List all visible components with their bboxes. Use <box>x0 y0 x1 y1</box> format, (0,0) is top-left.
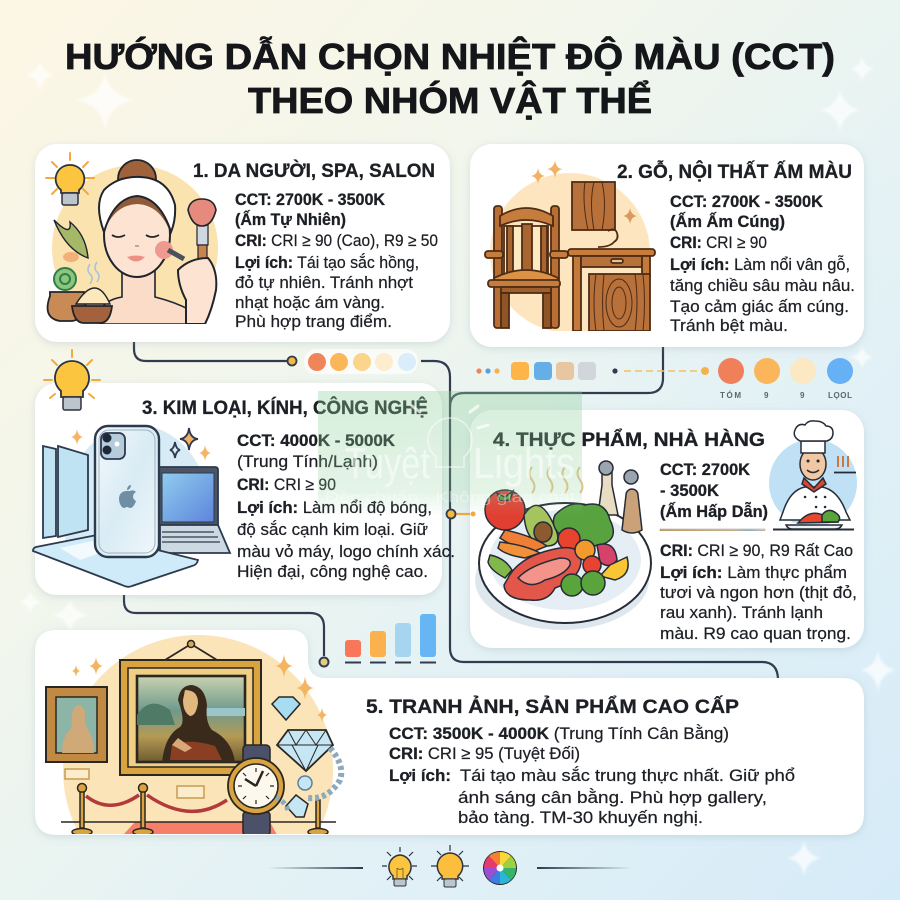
icon: plain bulb <box>431 845 469 887</box>
panel 2 text: CRI: CRI ≥ 90 <box>670 234 767 252</box>
panel 2 text <box>670 193 855 335</box>
panel 4 text: CRI: CRI ≥ 90, R9 Rất Cao <box>660 542 853 560</box>
swatch row: squares and palette: LỌOL <box>828 391 852 400</box>
panel 4 text: Lợi ích: Làm thực phẩm <box>660 564 847 582</box>
panel 2 text: Tránh bệt màu. <box>670 317 788 335</box>
bar chart swatches <box>320 614 436 666</box>
panel 3 heading: 3. KIM LOẠI, KÍNH, CÔNG NGHỆ <box>142 395 428 419</box>
icon: colour wheel <box>483 851 517 885</box>
panel 1 text: (Ấm Tự Nhiên) <box>235 210 346 229</box>
footer icons <box>268 845 632 887</box>
panel 4 text: CCT: 2700K <box>660 461 750 479</box>
swatch row: squares and palette <box>476 358 853 400</box>
panel 5 heading: 5. TRANH ẢNH, SẢN PHẨM CAO CẤP <box>366 695 739 718</box>
panel 3 text <box>237 432 455 581</box>
watermark <box>318 391 582 516</box>
panel 5 text: bảo tàng. TM-30 khuyến nghị. <box>458 809 703 827</box>
panel 3 text: Hiện đại, công nghệ cao. <box>237 563 428 581</box>
panel 1 text <box>235 191 438 331</box>
panel 4: food, restaurant <box>470 410 864 648</box>
panel 1 text: CCT: 2700K - 3500K <box>235 191 385 209</box>
title: THEO NHÓM VẬT THỂ <box>248 79 652 121</box>
panel 3 text: độ sắc cạnh kim loại. Giữ <box>237 520 428 539</box>
illustration: woman with brush <box>48 160 218 331</box>
panel 5 text: Tái tạo màu sắc trung thực nhất. Giữ phổ <box>460 766 795 785</box>
panel 1 text: nhạt hoặc ám vàng. <box>235 294 385 312</box>
panel 3 text: Lợi ích: Làm nổi độ bóng, <box>237 499 432 517</box>
connector lines between panels <box>124 342 778 680</box>
panel 3 text: màu vỏ máy, logo chính xác. <box>237 543 455 561</box>
panel 2 heading: 2. GỖ, NỘI THẤT ẤM MÀU <box>617 159 852 183</box>
panel 4 text: rau xanh). Tránh lạnh <box>660 604 823 622</box>
panel 3 text: CRI: CRI ≥ 90 <box>237 476 336 494</box>
panel 2: wood, warm furniture <box>470 144 864 347</box>
icon: light bulb <box>46 153 94 205</box>
panel 3: metal, glass, technology <box>33 383 455 595</box>
illustration: chef <box>769 421 857 530</box>
title: HƯỚNG DẪN CHỌN NHIỆT ĐỘ MÀU (CCT) <box>65 35 835 77</box>
panel 3 text: (Trung Tính/Lạnh) <box>237 453 378 471</box>
icon: filament bulb <box>382 847 417 886</box>
panel 5 text <box>389 724 795 827</box>
panel 5 text: CRI: CRI ≥ 95 (Tuyệt Đối) <box>389 745 580 763</box>
junction nodes <box>446 510 476 518</box>
panel 2 text: (Ấm Ấm Cúng) <box>670 212 785 231</box>
panel 3 text: CCT: 4000K - 5000K <box>237 432 395 450</box>
illustration: food plate <box>475 461 651 630</box>
panel 5 text: Lợi ích: <box>389 767 451 785</box>
icon: light bulb above panel 3 <box>44 350 100 410</box>
swatch row: warm dots <box>288 349 418 374</box>
panel 4 heading: 4. THỰC PHẨM, NHÀ HÀNG <box>493 428 765 451</box>
panel 4 text <box>660 461 857 643</box>
panel 1 text: Phù hợp trang điểm. <box>235 313 392 331</box>
swatch row: squares and palette: 9 <box>800 391 805 400</box>
panel 4 text: tươi và ngon hơn (thịt đỏ, <box>660 584 857 602</box>
swatch row: squares and palette: 9 <box>764 391 769 400</box>
panel 5: paintings, luxury products <box>33 630 866 839</box>
swatch row: squares and palette: TÓM <box>720 391 741 400</box>
panel 2 text: CCT: 2700K - 3500K <box>670 193 823 211</box>
panel 1 text: Lợi ích: Tái tạo sắc hồng, <box>235 253 419 272</box>
panel 1: skin, spa, salon <box>35 144 450 342</box>
illustration: phone, laptop, glass <box>33 425 230 587</box>
illustration: gallery and jewelry <box>45 635 344 834</box>
panel 4 text: - 3500K <box>660 482 719 500</box>
panel 1 heading: 1. DA NGƯỜI, SPA, SALON <box>193 158 435 182</box>
panel 2 text: Tạo cảm giác ấm cúng. <box>670 298 849 316</box>
panel 4 text: màu. R9 cao quan trọng. <box>660 625 851 643</box>
watermark: Tuyệt <box>345 439 430 488</box>
panel 2 text: tăng chiều sâu màu nâu. <box>670 277 855 295</box>
watermark: Đèn chuẩn - Không gian chất <box>325 489 576 506</box>
panel 1 text: CRI: CRI ≥ 90 (Cao), R9 ≥ 50 <box>235 232 438 250</box>
panel 5 text: CCT: 3500K - 4000K (Trung Tính Cân Bằng) <box>389 724 729 743</box>
panel 2 text: Lợi ích: Làm nổi vân gỗ, <box>670 255 850 274</box>
watermark: Lights <box>473 439 575 488</box>
panel 1 text: đỏ tự nhiên. Tránh nhợt <box>235 274 413 292</box>
title <box>65 35 835 121</box>
panel 4 text: (Ấm Hấp Dẫn) <box>660 502 768 521</box>
panel 5 text: ánh sáng cân bằng. Phù hợp gallery, <box>458 788 767 807</box>
illustration: chair and desk <box>485 160 655 333</box>
